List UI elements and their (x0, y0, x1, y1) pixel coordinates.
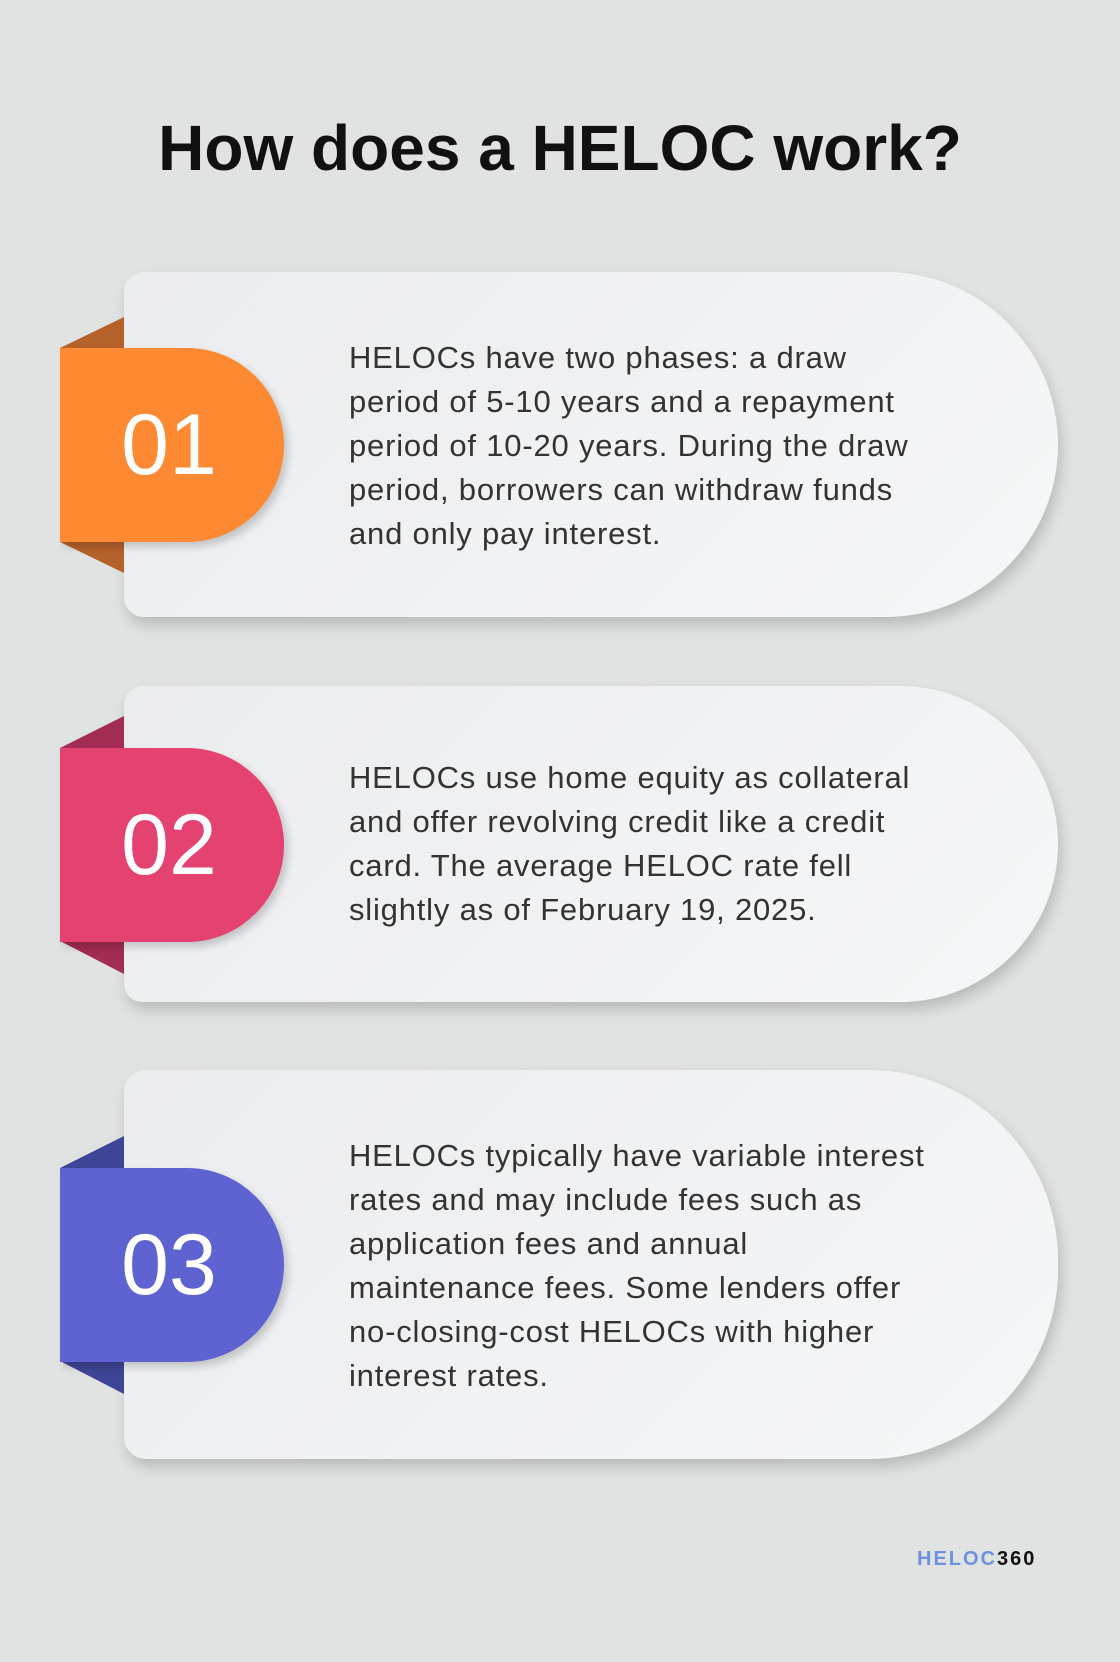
text 1 (349, 340, 908, 551)
text 2: slightly as of February 19, 2025. (349, 892, 817, 927)
text 2: and offer revolving credit like a credit (349, 804, 885, 839)
panel: step 3 (124, 1070, 1058, 1459)
text 1: period, borrowers can withdraw funds (349, 472, 893, 507)
text 1: period of 10-20 years. During the draw (349, 428, 908, 463)
text 3: maintenance fees. Some lenders offer (349, 1270, 901, 1305)
badge 01 (60, 348, 284, 542)
fold 3 (60, 1136, 124, 1394)
badge 03 (60, 1168, 284, 1362)
fold 2 (60, 716, 124, 974)
text 3 (349, 1138, 925, 1393)
text 2: card. The average HELOC rate fell (349, 848, 852, 883)
text 1: period of 5-10 years and a repayment (349, 384, 895, 419)
text 1: and only pay interest. (349, 516, 661, 551)
text 3: rates and may include fees such as (349, 1182, 862, 1217)
badge 01: 01 (121, 396, 217, 492)
text 2 (349, 760, 910, 927)
text 3: no-closing-cost HELOCs with higher (349, 1314, 874, 1349)
panel: step 2 (124, 686, 1058, 1002)
badge 02 (60, 748, 284, 942)
logo: HELOC360 (917, 1548, 1036, 1570)
fold 1 (60, 317, 124, 573)
badge 02: 02 (121, 796, 217, 892)
text 2: HELOCs use home equity as collateral (349, 760, 910, 795)
text 3: interest rates. (349, 1358, 549, 1393)
title: How does a HELOC work? (158, 112, 962, 184)
text 3: application fees and annual (349, 1226, 748, 1261)
text 3: HELOCs typically have variable interest (349, 1138, 925, 1173)
badge 03: 03 (121, 1216, 217, 1312)
text 1: HELOCs have two phases: a draw (349, 340, 847, 375)
panel: step 1 (124, 272, 1058, 617)
